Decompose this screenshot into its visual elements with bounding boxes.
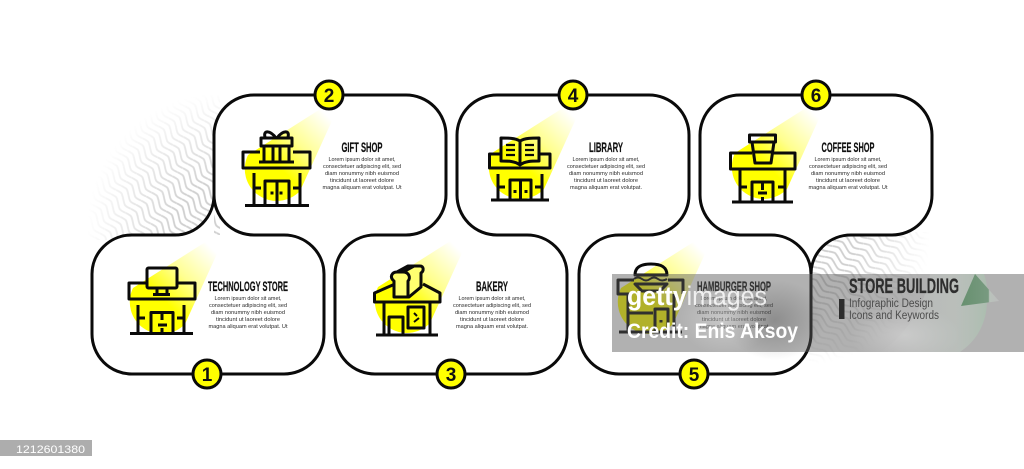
title: TECHNOLOGY STORE [208, 278, 288, 294]
wave pattern: right [812, 232, 916, 340]
text block: tincidunt ut laoreet dolore [702, 317, 766, 323]
text block: tincidunt ut laoreet dolore [460, 317, 524, 323]
white gaps behind outline [175, 195, 851, 275]
spotlight cone [618, 241, 709, 334]
text block: tincidunt ut laoreet dolore [574, 178, 638, 184]
text block: magna aliquam erat volutpat. Ut [322, 185, 402, 191]
text block: consectetuer adipiscing elit, sed [453, 303, 531, 309]
text block: diam nonummy nibh euismod [697, 310, 771, 316]
text block: tincidunt ut laoreet dolore [816, 178, 880, 184]
text block: tincidunt ut laoreet dolore [216, 317, 280, 323]
badge 5 [680, 360, 708, 388]
watermark band [612, 274, 1024, 365]
badge 5: 5 [689, 365, 700, 386]
text block: diam nonummy nibh euismod [569, 171, 643, 177]
text block: diam nonummy nibh euismod [811, 171, 885, 177]
icon: coffee shop building [730, 135, 795, 202]
badge 4: 4 [568, 86, 579, 107]
title: BAKERY [476, 278, 508, 294]
connected panel outline [92, 95, 932, 374]
text block: consectetuer adipiscing elit, sed [567, 164, 645, 170]
text block: Lorem ipsum dolor sit amet, [572, 157, 640, 163]
text block: diam nonummy nibh euismod [455, 310, 529, 316]
icon: hamburger shop building [618, 264, 683, 332]
badge 2 [315, 81, 343, 109]
image id tag: 1212601380 [16, 444, 85, 456]
spotlight cone [130, 241, 221, 334]
watermark swirl shading [680, 274, 999, 365]
text block: magna aliquam erat volutpat. [570, 185, 642, 191]
text block: consectetuer adipiscing elit, sed [809, 164, 887, 170]
icon: bakery building [374, 266, 440, 335]
text block: Lorem ipsum dolor sit amet, [214, 296, 282, 302]
text block: Lorem ipsum dolor sit amet, [328, 157, 396, 163]
heading: store building: Infographic Design [849, 298, 933, 310]
watermark text: gettyimages [627, 281, 767, 311]
title: GIFT SHOP [342, 139, 382, 155]
icon: library building [490, 138, 550, 200]
text block [695, 296, 773, 330]
text block: tincidunt ut laoreet dolore [330, 178, 394, 184]
text block: diam nonummy nibh euismod [325, 171, 399, 177]
spotlight cone [375, 240, 466, 333]
heading: store building [839, 274, 959, 322]
text block: consectetuer adipiscing elit, sed [323, 164, 401, 170]
text block [567, 157, 645, 191]
text block: magna aliquam erat volutpat. [456, 324, 528, 330]
text block [322, 157, 402, 191]
badge 2: 2 [324, 86, 334, 107]
text block: magna aliquam erat volutpat. Ut [808, 185, 888, 191]
panel: bakery [335, 235, 567, 374]
text block: consectetuer adipiscing elit, sed [209, 303, 287, 309]
icon: technology store building [129, 268, 195, 334]
text block [808, 157, 888, 191]
badge 6 [802, 81, 830, 109]
spotlight cone [245, 108, 336, 201]
text block [208, 296, 288, 330]
wave pattern: left [103, 110, 220, 240]
panel: coffee shop [700, 95, 932, 235]
text block: diam nonummy nibh euismod [211, 310, 285, 316]
badge 1 [193, 360, 221, 388]
text block: magna aliquam erat volutpat. Ut [208, 324, 288, 330]
badge 1: 1 [202, 365, 213, 386]
title: LIBRARY [589, 139, 623, 155]
panel: hamburger shop [579, 235, 811, 374]
spotlight cone [489, 106, 580, 199]
text block: Lorem ipsum dolor sit amet, [700, 296, 768, 302]
image id tag [0, 440, 92, 456]
panel: gift shop [214, 95, 446, 235]
badge 6: 6 [811, 86, 821, 107]
heading: store building: Icons and Keywords [849, 310, 939, 322]
panel: technology store [92, 235, 324, 374]
text block: Lorem ipsum dolor sit amet, [814, 157, 882, 163]
spotlight cone [732, 106, 823, 199]
title: HAMBURGER SHOP [697, 278, 771, 294]
panel: library [457, 95, 689, 235]
text block: magna aliquam erat volutpat. [698, 324, 770, 330]
icon: gift shop building [243, 132, 310, 206]
title: COFFEE SHOP [822, 139, 874, 155]
watermark band: Credit: Enis Aksoy [627, 320, 798, 343]
badge 4 [559, 81, 587, 109]
text block: Lorem ipsum dolor sit amet, [458, 296, 526, 302]
badge 3 [437, 360, 465, 388]
badge 3: 3 [446, 365, 456, 386]
text block [453, 296, 531, 330]
text block: consectetuer adipiscing elit, sed [695, 303, 773, 309]
